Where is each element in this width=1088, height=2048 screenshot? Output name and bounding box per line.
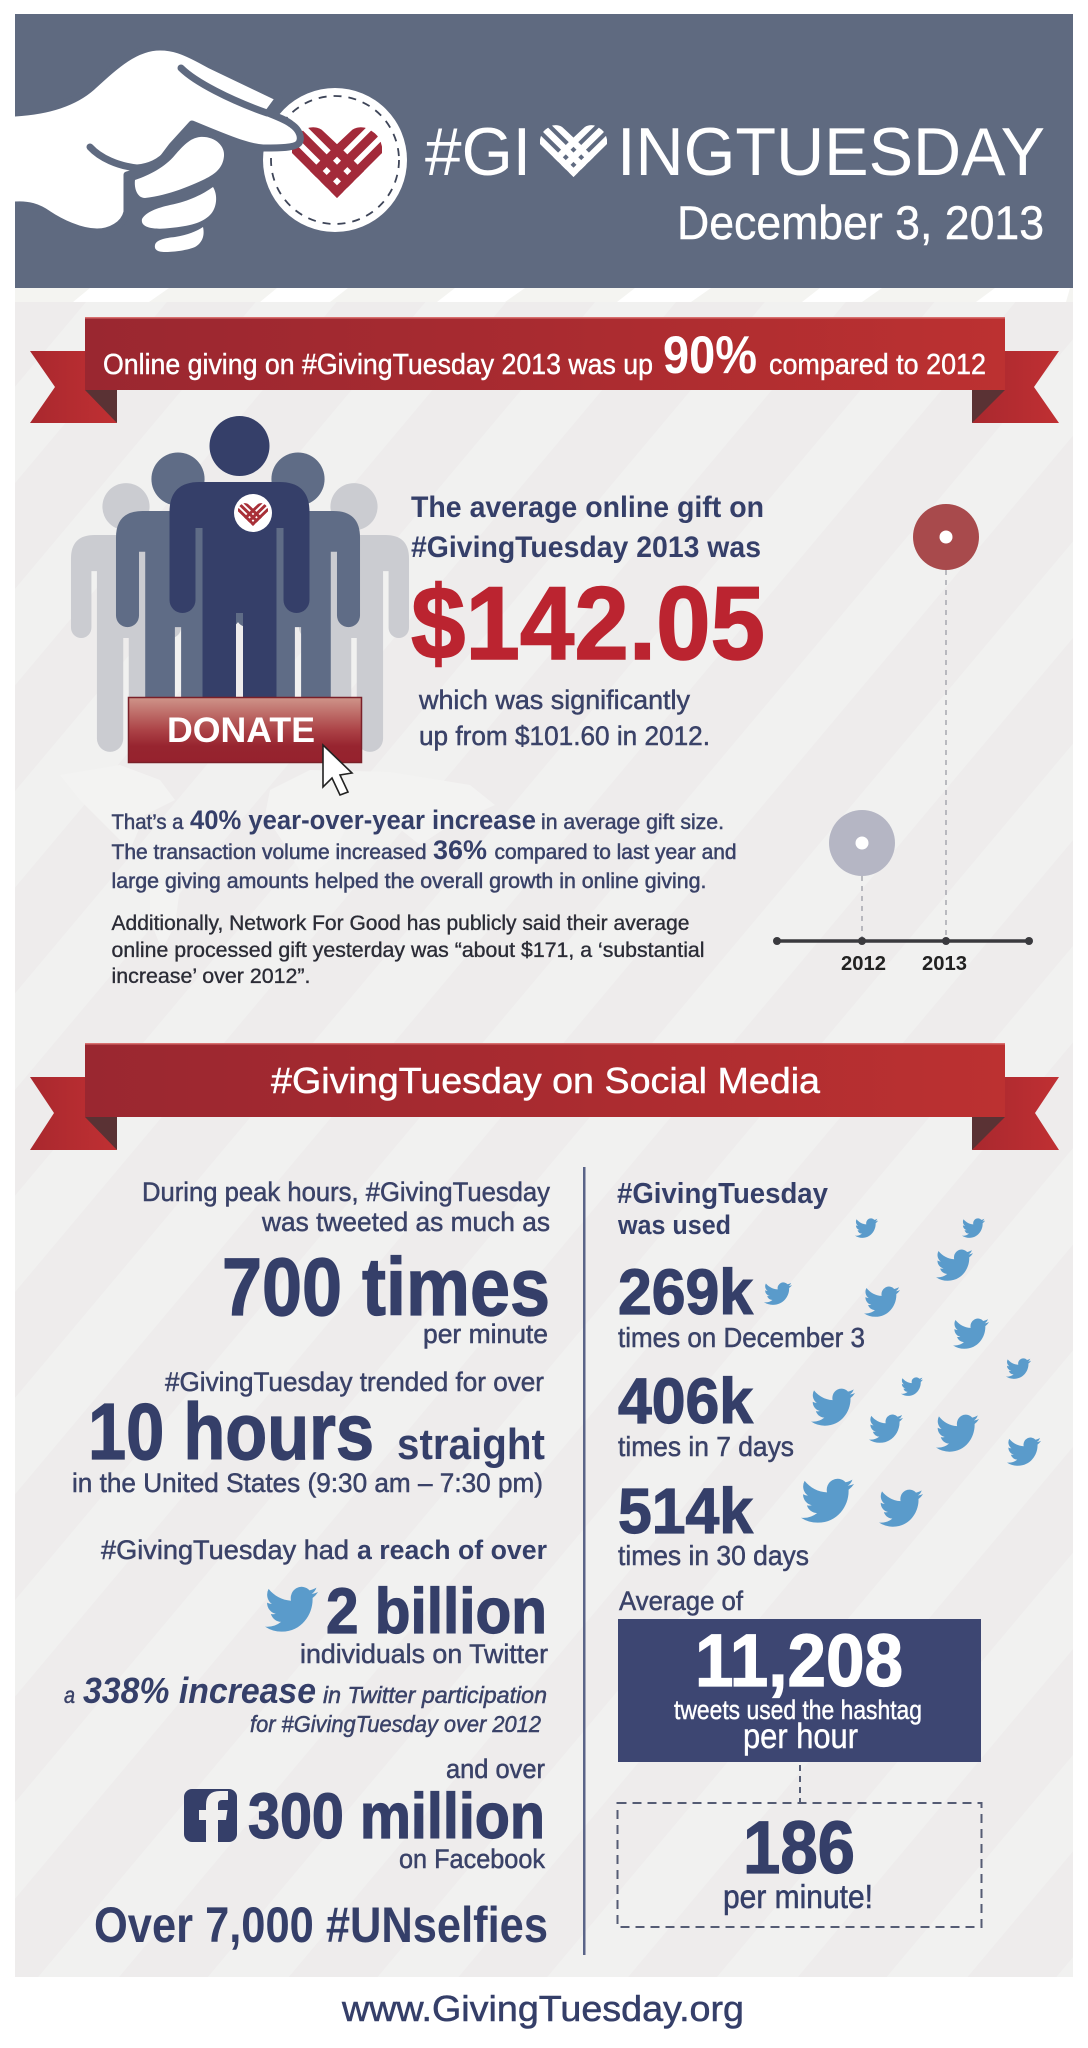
- header band: [5, 14, 1073, 288]
- title: #GivingTuesday: INGTUESDAY: [617, 114, 1045, 190]
- ribbon heading: #GivingTuesday on Social Media: [271, 1060, 821, 1101]
- ribbon: online giving up 90%: [30, 317, 1059, 423]
- ribbon: social media: [30, 1043, 1059, 1150]
- ribbon text: [103, 326, 986, 385]
- ribbon text: Online giving on #GivingTuesday 2013 was up: [103, 349, 653, 381]
- stat: 2 billion on Twitter: 2 billion: [326, 1575, 547, 1647]
- label: average of: Average of: [619, 1586, 743, 1616]
- donate button: DONATE: [167, 711, 315, 750]
- people illustration: [71, 416, 409, 795]
- paragraph: year over year increase: That’s a: [112, 811, 184, 834]
- right column: hashtag usage: [617, 1178, 1041, 1927]
- stat: 300 million on Facebook: on Facebook: [399, 1844, 545, 1874]
- stat: 10 hours straight: straight: [397, 1420, 545, 1469]
- paragraph: Network For Good: increase’ over 2012”.: [112, 965, 310, 988]
- box: per minute: 186: [743, 1806, 855, 1889]
- stat: 406k: 406k: [618, 1365, 753, 1437]
- person: far right: [299, 483, 409, 752]
- stat: 338% increase: for #GivingTuesday over 2012: [250, 1711, 541, 1737]
- box: per minute: [618, 1803, 982, 1927]
- icon: chest badge heart: [234, 494, 272, 532]
- icon: mouse cursor: [323, 745, 352, 795]
- stat: 10 hours straight: in the United States (9:30 am – 7:30 pm): [72, 1468, 543, 1498]
- dot chart 2012 vs 2013: [773, 504, 1033, 975]
- icon: facebook: [184, 1789, 237, 1842]
- stat: 406k: times in 7 days: [618, 1431, 794, 1462]
- dashed connector: [799, 1765, 801, 1802]
- paragraph: Network For Good: online processed gift yesterday was “about $171, a ‘substantial: [112, 939, 704, 962]
- average gift text: The average online gift on: [411, 491, 764, 524]
- paragraph: year over year increase: The transaction volume increased: [112, 841, 426, 864]
- stat: 700 times per minute: [142, 1177, 550, 1349]
- title: #GivingTuesday: [425, 114, 1045, 190]
- stat: 700 times per minute: was tweeted as much as: [261, 1207, 550, 1237]
- faint world map: [60, 765, 495, 950]
- ribbon text: compared to 2012: [769, 349, 986, 381]
- stat: 338% increase: in Twitter participation: [323, 1682, 547, 1708]
- stat: 514k: 514k: [618, 1475, 753, 1547]
- stat: 300 million on Facebook: 300 million: [248, 1780, 545, 1852]
- column divider: [583, 1167, 586, 1955]
- person: mid right: [236, 453, 360, 756]
- heading: hashtag was used: was used: [617, 1210, 731, 1240]
- person: far left: [71, 483, 181, 752]
- stat: 338% increase: a: [64, 1682, 75, 1708]
- box: tweets per hour: 11,208: [695, 1619, 903, 1702]
- paragraph: year over year increase: 40% year-over-year increase: [190, 805, 536, 835]
- stat: 2 billion on Twitter: a reach of over: [357, 1535, 547, 1565]
- stat: 2 billion on Twitter: [101, 1535, 548, 1669]
- person: mid left: [116, 453, 240, 756]
- stat: 300 million on Facebook: and over: [446, 1754, 545, 1784]
- stat: 338% increase: [64, 1670, 547, 1737]
- stat: 269k: [618, 1256, 865, 1353]
- paragraph: year over year increase: in average gift size.: [541, 811, 724, 834]
- paragraph: year over year increase: 36%: [433, 835, 487, 865]
- average gift text: #GivingTuesday 2013 was: [411, 531, 761, 564]
- title: #GivingTuesday: #GI: [425, 114, 531, 190]
- box: tweets per hour: tweets used the hashtag: [674, 1695, 922, 1725]
- stat: 700 times per minute: 700 times: [222, 1242, 550, 1333]
- big number: $142.05: $142.05: [411, 566, 765, 682]
- ribbon text: 90%: [663, 326, 757, 385]
- icon: pointing hand: [5, 47, 300, 252]
- heading: hashtag was used: #GivingTuesday: [617, 1178, 828, 1210]
- stat: 10 hours straight: [72, 1367, 545, 1498]
- stat: 700 times per minute: per minute: [423, 1319, 548, 1349]
- person: centre: [170, 416, 310, 758]
- stat: 514k: [618, 1475, 809, 1571]
- paragraph: year over year increase: compared to last year and: [494, 841, 736, 864]
- box: tweets per hour: [618, 1619, 981, 1762]
- icon: twitter bird: [265, 1587, 318, 1632]
- average gift text: up from $101.60 in 2012.: [419, 721, 710, 751]
- date: December 3, 2013: [677, 196, 1044, 249]
- marker: 2012: [829, 810, 895, 876]
- stat: 700 times per minute: During peak hours, #GivingTuesday: [142, 1177, 550, 1207]
- flock of twitter birds: [764, 1218, 1041, 1527]
- paragraph: Network For Good: Additionally, Network For Good has publicly said their average: [112, 912, 690, 935]
- average gift text: [411, 491, 765, 751]
- paragraph: Network For Good: [112, 912, 704, 988]
- stat: 2 billion on Twitter: #GivingTuesday had: [101, 1535, 349, 1565]
- marker: 2013: [913, 504, 979, 570]
- stat: 2 billion on Twitter: individuals on Twitter: [300, 1639, 548, 1669]
- box: per minute: per minute!: [723, 1878, 873, 1915]
- stat: 514k: times in 30 days: [618, 1540, 809, 1571]
- stat: UNselfies: Over 7,000 #UNselfies: [94, 1897, 548, 1953]
- axis label 2013: 2013: [922, 953, 967, 975]
- stat: 406k: [618, 1365, 794, 1462]
- average gift text: which was significantly: [418, 685, 690, 715]
- box: tweets per hour: per hour: [743, 1717, 858, 1756]
- stat: 300 million on Facebook: [184, 1754, 545, 1874]
- icon: heart logo letter V: [535, 121, 612, 179]
- paragraph: year over year increase: large giving amounts helped the overall growth in online giving.: [112, 870, 706, 893]
- stat: 269k: times on December 3: [618, 1322, 865, 1353]
- stat: 10 hours straight: #GivingTuesday trended for over: [165, 1367, 544, 1397]
- stat: 269k: 269k: [618, 1256, 753, 1328]
- left column: tweets: [64, 1177, 550, 1953]
- icon: coin with heart: [263, 88, 407, 232]
- stat: 10 hours straight: 10 hours: [88, 1387, 374, 1476]
- footer url: www.GivingTuesday.org: [341, 1988, 744, 2029]
- stat: 338% increase: 338% increase: [83, 1670, 316, 1711]
- axis label 2012: 2012: [841, 953, 886, 975]
- donate button: [128, 698, 362, 762]
- paragraph: year over year increase: [112, 805, 736, 893]
- heading: hashtag was used: [617, 1178, 828, 1240]
